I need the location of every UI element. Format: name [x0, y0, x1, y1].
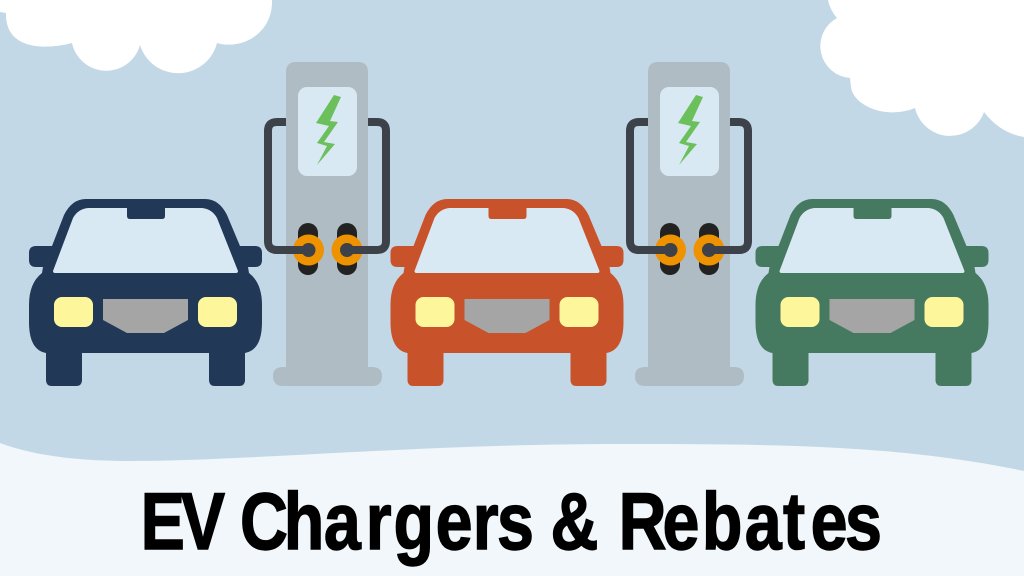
station post — [635, 62, 744, 386]
headlights — [54, 297, 237, 327]
headlights — [416, 297, 598, 327]
title: EV Chargers & Rebates — [141, 476, 882, 566]
orange connectors — [277, 234, 377, 266]
charging sockets — [298, 223, 357, 275]
station post — [273, 62, 382, 386]
headlights — [780, 297, 964, 327]
station screen — [660, 87, 719, 176]
car: orange — [390, 199, 624, 386]
windshield — [53, 208, 238, 273]
charging cables — [268, 122, 386, 250]
grille — [103, 299, 188, 333]
car body — [29, 199, 262, 386]
grille — [464, 299, 550, 333]
cloud: top left — [0, 0, 272, 73]
car body — [390, 199, 624, 386]
orange connectors — [639, 234, 739, 266]
charging sockets — [660, 223, 719, 275]
car body — [756, 199, 988, 386]
icon: lightning bolt — [316, 95, 341, 165]
windshield — [414, 208, 600, 273]
charging cables — [630, 122, 748, 250]
car: navy — [29, 199, 262, 386]
station screen — [298, 87, 357, 176]
cloud: top right — [820, 0, 1024, 137]
grille — [830, 299, 914, 333]
snow ground — [0, 443, 1024, 576]
charging station: left — [268, 62, 386, 386]
car: green — [756, 199, 988, 386]
charging station: right — [630, 62, 748, 386]
windshield — [780, 208, 964, 273]
icon: lightning bolt — [678, 95, 703, 165]
